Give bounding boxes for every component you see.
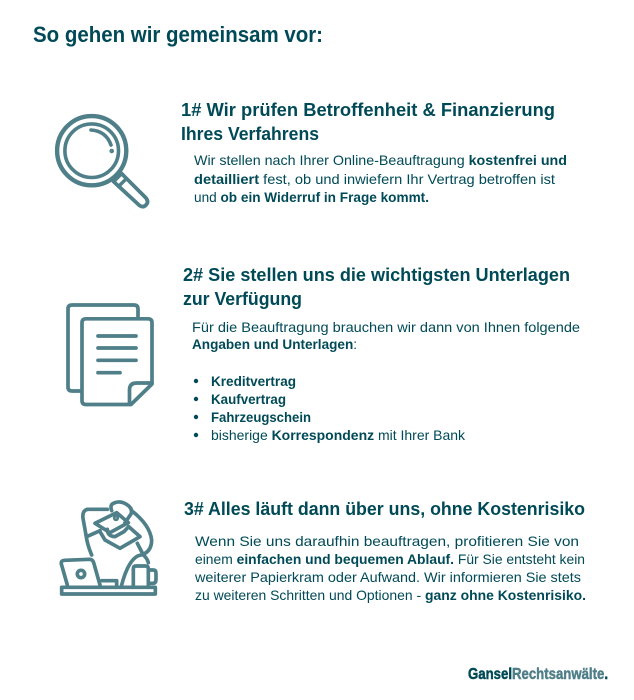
step 1 text — [194, 152, 567, 205]
step 2 document list: bisherige Korrespondenz mit Ihrer Bank — [211, 427, 466, 443]
step 2 heading: 2# Sie stellen uns die wichtigsten Unterlagen — [183, 265, 570, 285]
step 1 heading — [181, 100, 555, 144]
step 2 document list: Fahrzeugschein — [211, 409, 311, 425]
step 2 document list: Kreditvertrag — [211, 373, 296, 389]
title: So gehen wir gemeinsam vor: — [33, 22, 323, 47]
step 1 text: detailliert fest, ob und inwiefern Ihr Vertrag betroffen ist — [194, 171, 555, 187]
step 2 heading — [183, 265, 570, 309]
step 3 text: weiterer Papierkram oder Aufwand. Wir informieren Sie stets — [194, 569, 581, 585]
icon: person working at laptop — [61, 502, 156, 594]
step 2 text: Angaben und Unterlagen: — [192, 336, 357, 352]
step 2 text: Für die Beauftragung brauchen wir dann von Ihnen folgende — [192, 319, 580, 335]
step 2 heading: zur Verfügung — [183, 289, 302, 309]
step 3 text: Wenn Sie uns daraufhin beauftragen, profitieren Sie von — [195, 533, 579, 549]
logo: GanselRechtsanwälte. — [468, 666, 608, 683]
icon: magnifying glass — [57, 116, 148, 207]
icon: documents — [68, 305, 152, 404]
step 2 text — [192, 319, 580, 352]
step 2 document list: Kaufvertrag — [211, 391, 286, 407]
step 3 text — [194, 533, 586, 603]
step 1 heading: 1# Wir prüfen Betroffenheit & Finanzierung — [181, 100, 555, 120]
step 3 text: zu weiteren Schritten und Optionen - ganz ohne Kostenrisiko. — [195, 587, 586, 603]
step 3 heading: 3# Alles läuft dann über uns, ohne Kostenrisiko — [184, 499, 585, 519]
step 2 document list — [194, 373, 466, 443]
step 3 text: einem einfachen und bequemen Ablauf. Für Sie entsteht kein — [195, 551, 585, 567]
step 1 text: Wir stellen nach Ihrer Online-Beauftragung kostenfrei und — [194, 152, 567, 168]
step 1 heading: Ihres Verfahrens — [181, 124, 319, 144]
step 1 text: und ob ein Widerruf in Frage kommt. — [194, 189, 429, 205]
